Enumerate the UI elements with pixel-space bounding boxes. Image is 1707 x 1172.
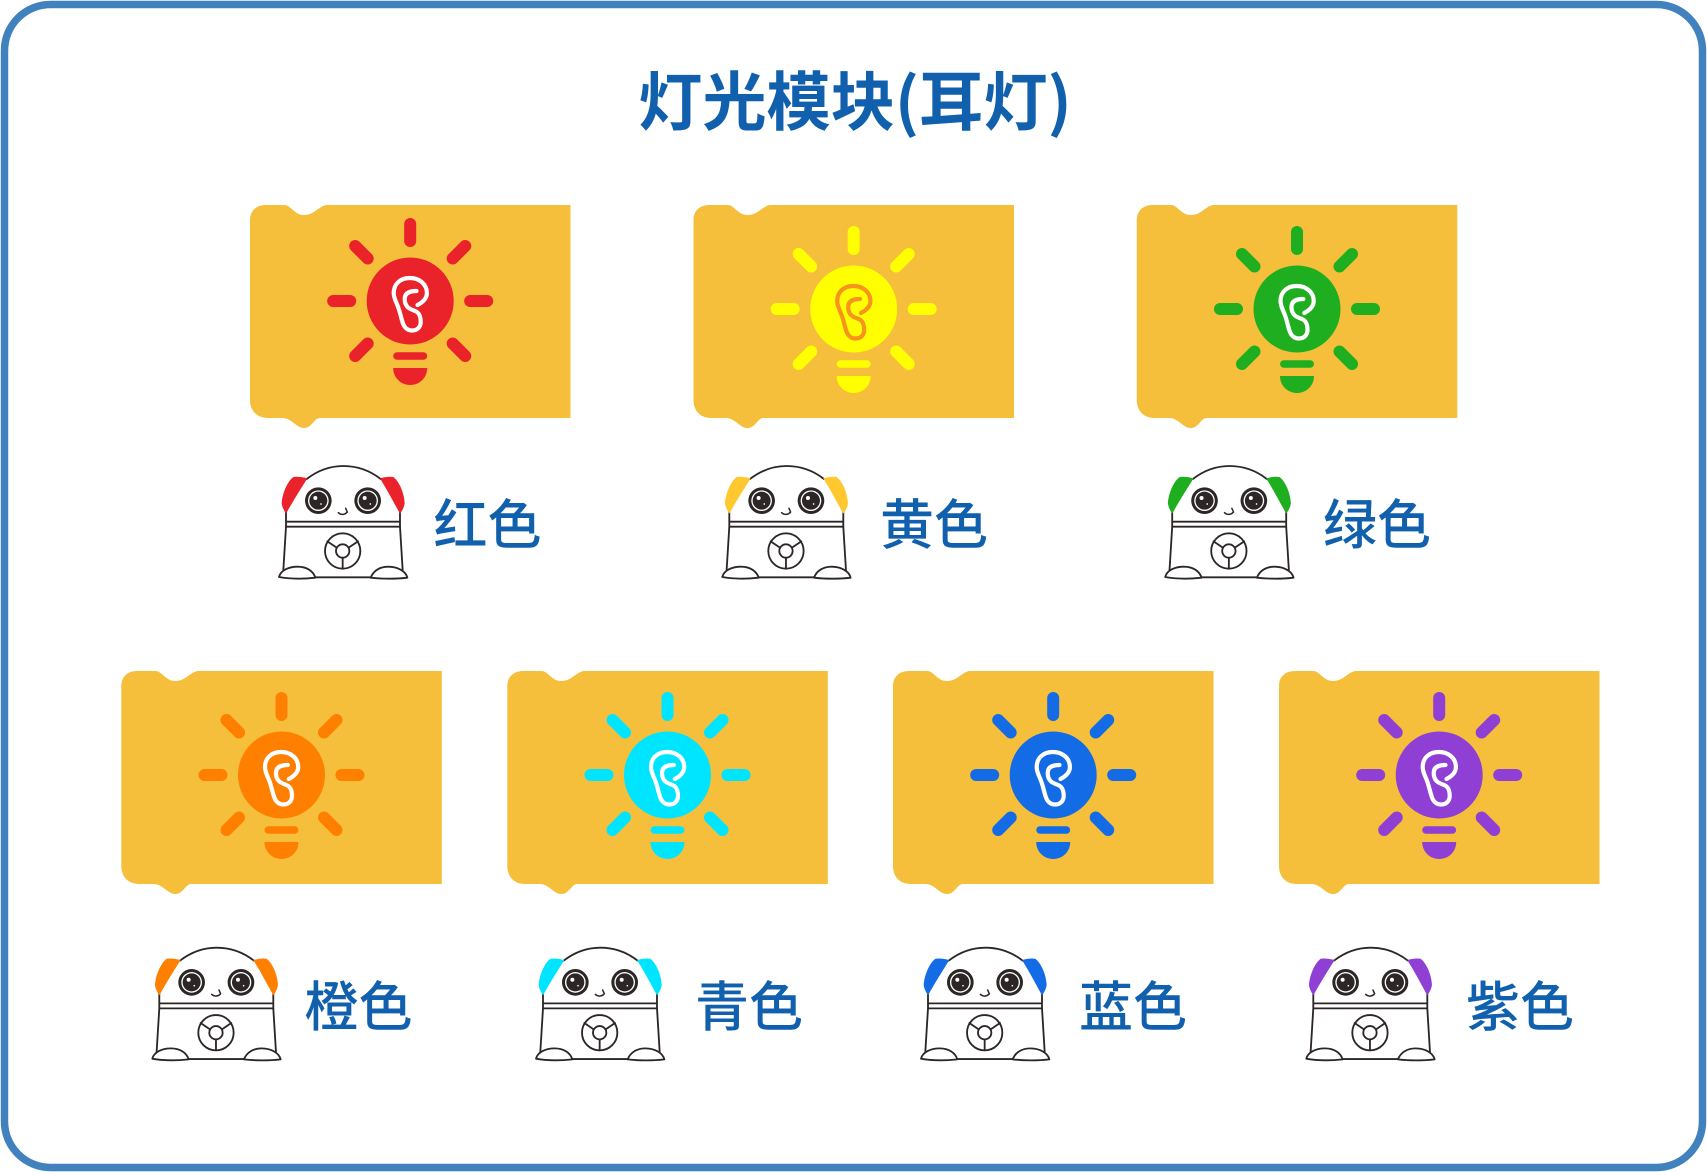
icon: robot with green ears: [1165, 466, 1294, 579]
icon: yellow bulb with ear: [777, 232, 931, 393]
panel: blue light block: [893, 671, 1214, 894]
label: purple: 紫色: [1466, 978, 1574, 1038]
label: yellow: 黄色: [880, 496, 988, 556]
icon: cyan bulb with ear: [590, 698, 744, 859]
title: 灯光模块(耳灯): [638, 52, 1072, 144]
label: green: 绿色: [1323, 496, 1431, 556]
icon: purple bulb with ear: [1362, 698, 1516, 859]
icon: blue bulb with ear: [976, 698, 1130, 859]
label: cyan: 青色: [695, 978, 803, 1038]
icon: robot with yellow ears: [722, 466, 851, 579]
icon: robot with orange ears: [152, 948, 281, 1060]
label: red: 红色: [434, 496, 542, 556]
label: orange: 橙色: [304, 978, 412, 1038]
icon: robot with red ears: [279, 466, 407, 579]
panel: yellow light block: [694, 205, 1014, 428]
panel: red light block: [250, 205, 570, 428]
panel: cyan light block: [507, 671, 828, 894]
panel: green light block: [1137, 205, 1457, 428]
panel: orange light block: [121, 671, 442, 894]
icon: red bulb with ear: [333, 224, 487, 385]
label: blue: 蓝色: [1079, 978, 1187, 1038]
icon: robot with blue ears: [921, 948, 1049, 1060]
icon: orange bulb with ear: [204, 698, 358, 859]
icon: robot with cyan ears: [536, 948, 664, 1060]
icon: green bulb with ear: [1220, 232, 1374, 393]
panel: purple light block: [1279, 671, 1600, 894]
icon: robot with purple ears: [1306, 948, 1435, 1060]
